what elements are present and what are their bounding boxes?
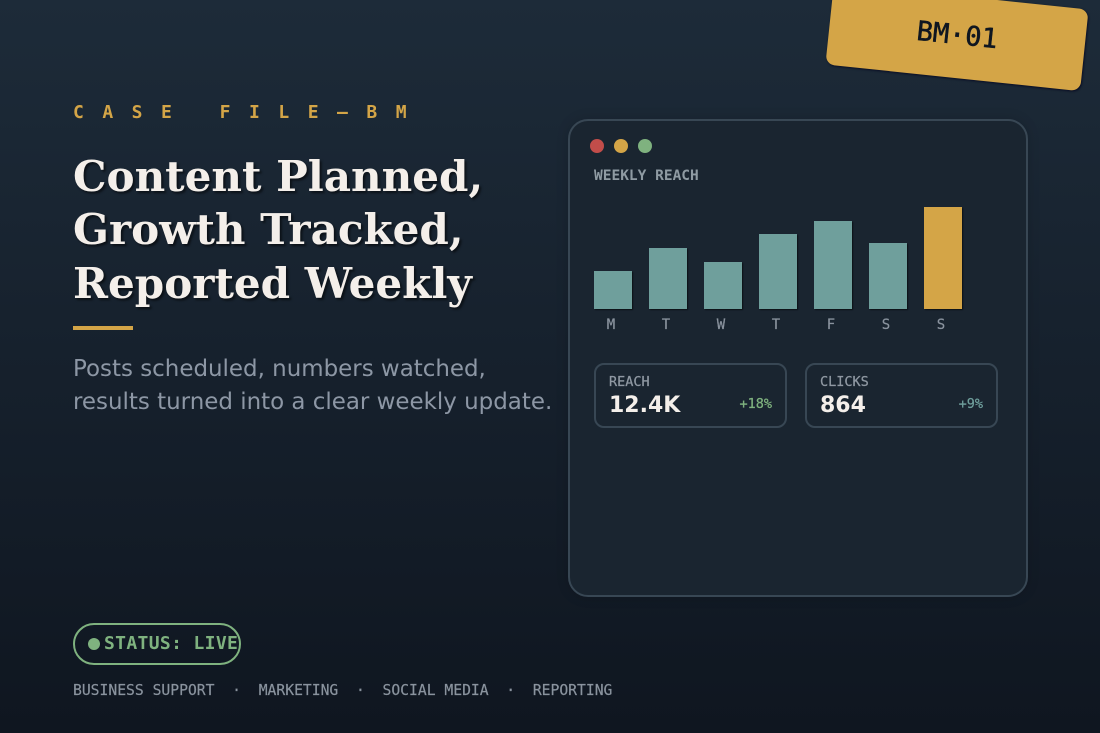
- status dot: [88, 638, 100, 650]
- status text: STATUS: LIVE: [104, 633, 238, 654]
- accent rule: [73, 326, 133, 330]
- dot: green: [638, 139, 652, 153]
- bar: Monday: [594, 271, 632, 309]
- window dots: [590, 139, 652, 153]
- stat value: 12.4K: [609, 393, 680, 418]
- day labels: T: [662, 317, 670, 333]
- day labels: F: [827, 317, 835, 333]
- panel: weekly reach dashboard: [568, 119, 1028, 597]
- panel heading: WEEKLY REACH: [594, 168, 699, 184]
- bar: Sunday highlighted: [924, 207, 962, 309]
- day labels: [607, 317, 945, 333]
- bar: Thursday: [759, 234, 797, 309]
- bar: Friday: [814, 221, 852, 309]
- stat change: +18%: [739, 396, 772, 412]
- bar chart: weekly reach: [594, 207, 964, 333]
- title: Content Planned, Growth Tracked, Reported Weekly: [73, 151, 483, 308]
- dot: amber: [614, 139, 628, 153]
- day labels: T: [772, 317, 780, 333]
- stat card: clicks: [805, 363, 998, 428]
- stat card: reach: [594, 363, 787, 428]
- day labels: S: [882, 317, 890, 333]
- stat change: +9%: [959, 396, 983, 412]
- status pill: [73, 623, 241, 665]
- dot: red: [590, 139, 604, 153]
- bar: Saturday: [869, 243, 907, 309]
- tag label: BM·01: [915, 16, 999, 55]
- stat label: REACH: [609, 374, 650, 390]
- eyebrow: case file: CASE FILE—BM: [73, 102, 425, 123]
- bar: Tuesday: [649, 248, 687, 309]
- day labels: S: [937, 317, 945, 333]
- stat value: 864: [820, 393, 866, 418]
- tags line: BUSINESS SUPPORT · MARKETING · SOCIAL MEDIA · REPORTING: [73, 682, 612, 699]
- bar: Wednesday: [704, 262, 742, 309]
- tag: BM-01: [825, 0, 1089, 91]
- stat label: CLICKS: [820, 374, 869, 390]
- day labels: W: [717, 317, 725, 333]
- day labels: M: [607, 317, 615, 333]
- subtitle: Posts scheduled, numbers watched, results turned into a clear weekly update.: [73, 356, 552, 415]
